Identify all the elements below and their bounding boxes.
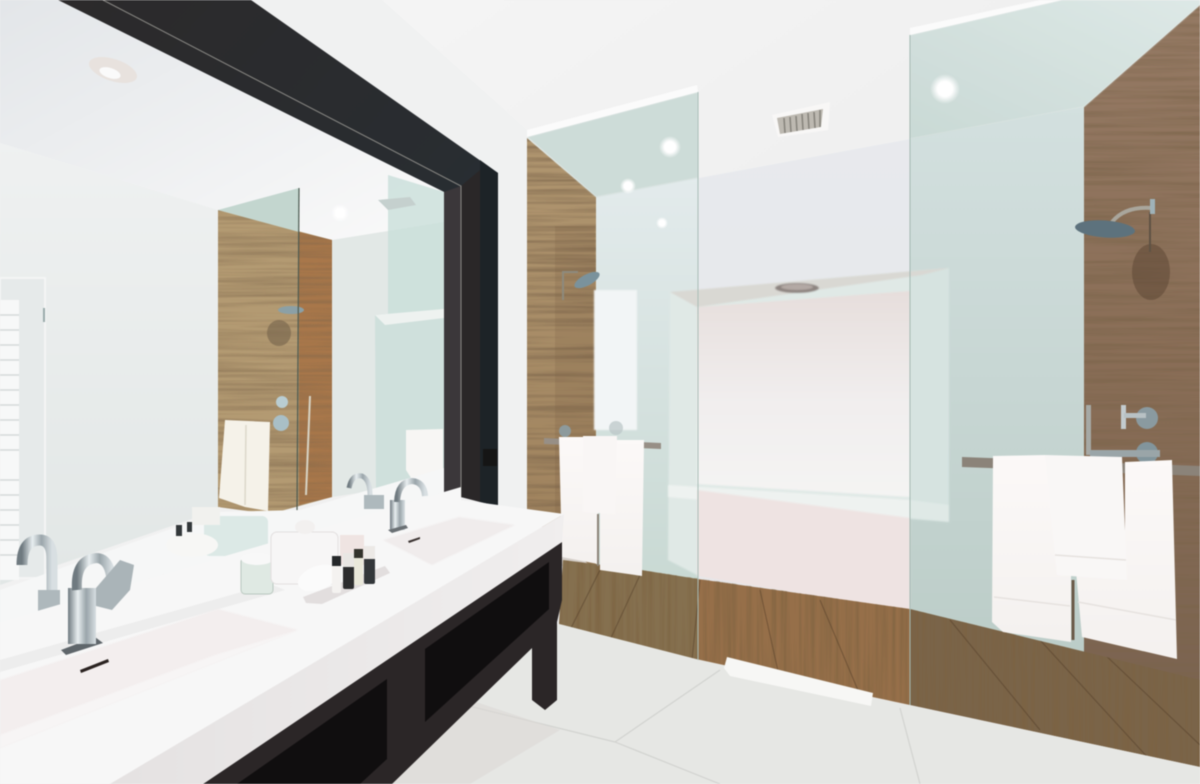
- left shower towels: [559, 436, 644, 576]
- mirrored door: [0, 278, 45, 580]
- left shower head: [563, 269, 602, 300]
- drinking glass: [241, 553, 273, 594]
- left wood shower wall: [527, 130, 597, 570]
- white tile floor: [385, 624, 1200, 784]
- right shower glass panel: [910, 0, 1200, 705]
- right glass tint on wall: [910, 107, 1084, 660]
- smoke detector: [89, 57, 137, 83]
- right shower head: [1074, 199, 1170, 300]
- mirror frame: [58, 0, 498, 506]
- shower back wall: [596, 107, 1084, 700]
- right wood shower wall: [1084, 5, 1200, 700]
- ceiling lights: [620, 74, 960, 229]
- mirrored glass panel: [218, 175, 444, 515]
- countertop: [0, 487, 564, 784]
- mirror reflection: [0, 0, 444, 625]
- front faucet: [61, 558, 134, 655]
- shower controls: [559, 405, 1160, 464]
- cabinet opening: upper: [425, 562, 549, 722]
- mirrored wall: [0, 218, 218, 584]
- right shower towels: [992, 455, 1177, 659]
- cabinet opening: lower: [237, 679, 387, 784]
- vanity base: [203, 542, 562, 784]
- mirrored towels: [219, 396, 443, 511]
- icon: ceiling vent: [772, 102, 830, 137]
- wood shower floor: [559, 560, 1200, 770]
- mirrored counter: [39, 468, 444, 577]
- mirrored wood wall: [218, 205, 333, 520]
- amenity tray with bottles: [294, 546, 390, 604]
- white reflection panel: [594, 290, 637, 430]
- rear faucet: [388, 481, 425, 533]
- mirrored tissue box and amenities: [166, 507, 268, 557]
- large sink: [0, 609, 298, 748]
- mirrored ceiling: [0, 0, 437, 189]
- left wall: [251, 0, 527, 510]
- mirrored faucets: [22, 476, 384, 612]
- niche with bench: [668, 268, 949, 612]
- left shower glass panel: [527, 85, 698, 660]
- left glass tint on wall: [596, 178, 698, 660]
- rolled floor mat: [724, 657, 873, 706]
- small sink: [383, 517, 515, 565]
- towel bars: [544, 438, 1200, 476]
- tissue box: [271, 520, 364, 584]
